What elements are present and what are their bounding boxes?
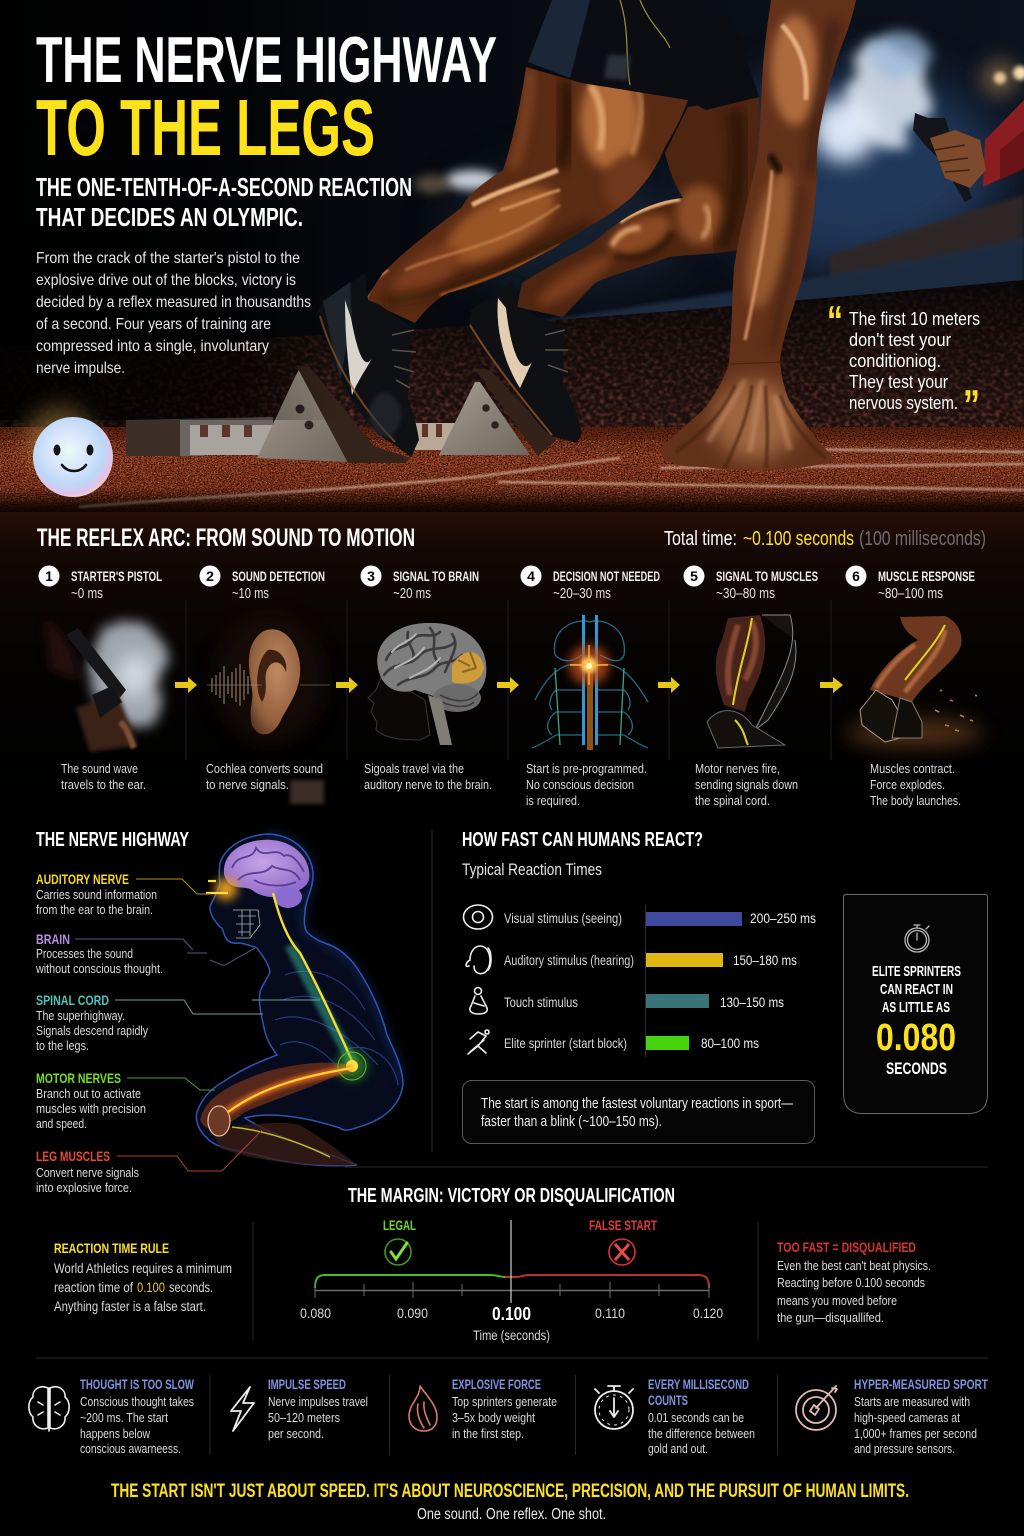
fact: every millisecond counts: EVERY MILLISECOND: [648, 1377, 749, 1392]
step 3: signal to brain: SIGNAL TO BRAIN: [393, 569, 479, 584]
step 1: starter's pistol: [38, 566, 166, 792]
step 3: signal to brain: Sigoals travel via the: [364, 761, 464, 776]
fact: thought is too slow: conscious awarneess.: [80, 1441, 181, 1456]
step 2: sound detection: Cochlea converts sound: [206, 761, 323, 776]
too fast disqualified: means you moved before: [777, 1293, 897, 1308]
auditory glow: [215, 878, 237, 900]
intro text: nerve impulse.: [36, 360, 125, 377]
timeline chart: legal vs false start: Time (seconds): [473, 1328, 550, 1343]
total time: (100 milliseconds): [859, 528, 986, 550]
step 4: decision not needed: 4: [527, 568, 535, 584]
too fast disqualified: Reacting before 0.100 seconds: [777, 1275, 925, 1290]
closing statement: One sound. One reflex. One shot.: [417, 1506, 606, 1523]
step 5: signal to muscles: sending signals down: [695, 777, 798, 792]
step 1: starter's pistol: The sound wave: [61, 761, 138, 776]
label: leg muscles: into explosive force.: [36, 1180, 132, 1195]
row: auditory: Auditory stimulus (hearing): [504, 953, 634, 968]
arrow: [336, 677, 358, 693]
step 6: muscle response: Muscles contract.: [870, 761, 955, 776]
row: visual: [464, 905, 816, 929]
total time: ~0.100 seconds: [743, 528, 854, 550]
pull quote: “: [827, 297, 843, 344]
label: motor nerves: MOTOR NERVES: [36, 1070, 121, 1086]
panel: how fast can humans react: [462, 829, 988, 1144]
heading: margin: THE MARGIN: VICTORY OR DISQUALIFICATION: [348, 1185, 675, 1207]
subtitle: [36, 172, 412, 232]
fact: explosive force: [409, 1377, 557, 1441]
fact: thought is too slow: THOUGHT IS TOO SLOW: [80, 1377, 194, 1392]
intro text: From the crack of the starter's pistol to the: [36, 250, 300, 267]
fact: thought is too slow: [29, 1377, 194, 1456]
timeline chart: legal vs false start: 0.100: [492, 1304, 531, 1324]
row: visual: Visual stimulus (seeing): [504, 911, 622, 926]
closing statement: [111, 1481, 909, 1523]
heading: nerve highway: THE NERVE HIGHWAY: [36, 829, 189, 851]
pull quote: [827, 297, 980, 428]
supporting arm and hand: [660, 0, 856, 470]
timeline chart: legal vs false start: 0.110: [595, 1306, 625, 1321]
step 5: signal to muscles: 5: [690, 568, 698, 584]
hero photo: sprinter in the blocks: [0, 0, 1024, 520]
left shoe: [318, 273, 419, 457]
fact: impulse speed: per second.: [268, 1426, 324, 1441]
step 4: decision not needed: DECISION NOT NEEDED: [553, 569, 660, 584]
step 4: decision not needed: is required.: [526, 793, 580, 808]
row: auditory: 150–180 ms: [733, 953, 797, 968]
stat card: 0.080 seconds: AS LITTLE AS: [882, 999, 950, 1016]
reaction time rule: REACTION TIME RULE: [54, 1240, 169, 1256]
stat card: 0.080 seconds: 0.080: [876, 1017, 956, 1059]
subtitle: THAT DECIDES AN OLYMPIC.: [36, 202, 303, 232]
intro text: [36, 250, 311, 377]
intro text: compressed into a single, involuntary: [36, 338, 269, 355]
label: spinal cord: SPINAL CORD: [36, 992, 109, 1008]
label: brain: without conscious thought.: [35, 961, 163, 976]
pull quote: don't test your: [849, 330, 951, 350]
intro text: of a second. Four years of training are: [36, 316, 271, 333]
illustration: brain in head silhouette: [368, 623, 486, 745]
stat card: 0.080 seconds: ELITE SPRINTERS: [872, 963, 961, 980]
shorts: [528, 0, 759, 110]
label: motor nerves: Branch out to activate: [36, 1086, 141, 1101]
fact: every millisecond counts: [595, 1377, 755, 1456]
illustration: explosive leg and dust: [847, 616, 983, 747]
step 3: signal to brain: [360, 566, 492, 792]
step 2: sound detection: SOUND DETECTION: [232, 569, 325, 584]
step 5: signal to muscles: the spinal cord.: [695, 793, 770, 808]
subheading: Typical Reaction Times: [462, 861, 602, 879]
timeline chart: legal vs false start: [300, 1217, 723, 1343]
icon: cross: [609, 1239, 635, 1265]
label: spinal cord: The superhighway.: [36, 1008, 125, 1023]
illustration: leg with nerve: [707, 615, 796, 748]
step 5: signal to muscles: ~30–80 ms: [716, 586, 775, 602]
row: visual: 200–250 ms: [750, 911, 816, 926]
fact: impulse speed: 50–120 meters: [268, 1410, 340, 1425]
timeline chart: legal vs false start: 0.120: [693, 1306, 723, 1321]
heading: reaction: HOW FAST CAN HUMANS REACT?: [462, 829, 703, 851]
pull quote: The first 10 meters: [849, 309, 980, 329]
timeline chart: legal vs false start: LEGAL: [383, 1217, 416, 1233]
timeline chart: legal vs false start: 0.080: [300, 1306, 331, 1321]
step 6: muscle response: 6: [852, 568, 860, 584]
stadium lights: [813, 98, 877, 162]
fact: explosive force: 3–5x body weight: [452, 1410, 535, 1425]
fact: impulse speed: [231, 1377, 368, 1441]
label: auditory nerve: from the ear to the brain.: [36, 902, 153, 917]
intro text: explosive drive out of the blocks, victory is: [36, 272, 296, 289]
fact: every millisecond counts: 0.01 seconds can be: [648, 1410, 744, 1425]
upper crowd band: [830, 195, 1024, 295]
step 4: decision not needed: ~20–30 ms: [553, 586, 611, 602]
label: spinal cord: [36, 992, 320, 1053]
timeline chart: legal vs false start: FALSE START: [589, 1217, 657, 1233]
fade to page black: [0, 488, 1024, 520]
label: auditory nerve: AUDITORY NERVE: [36, 871, 129, 887]
reaction time rule: [54, 1240, 232, 1314]
row: touch: Touch stimulus: [504, 995, 578, 1010]
step 6: muscle response: MUSCLE RESPONSE: [878, 569, 975, 584]
panel: the nerve highway: [35, 829, 403, 1195]
ribs: [275, 971, 398, 1085]
step 4: decision not needed: No conscious decision: [526, 777, 634, 792]
fact: every millisecond counts: the difference between: [648, 1426, 755, 1441]
reaction time rule: 0.100: [137, 1280, 165, 1295]
reaction time rule: seconds.: [169, 1280, 213, 1295]
label: leg muscles: LEG MUSCLES: [36, 1148, 110, 1164]
fact: hyper-measured sport: Starts are measured with: [854, 1394, 970, 1409]
fact: hyper-measured sport: and pressure sensors.: [854, 1441, 955, 1456]
stat card: 0.080 seconds: SECONDS: [886, 1059, 947, 1078]
step 1: starter's pistol: 1: [45, 568, 53, 584]
rear starting rail: [126, 417, 462, 456]
step 4: decision not needed: Start is pre-programmed.: [526, 761, 647, 776]
brain: [224, 840, 309, 897]
label: motor nerves: [36, 1070, 215, 1131]
title: [36, 23, 497, 172]
fact: impulse speed: Nerve impulses travel: [268, 1394, 368, 1409]
stand roof band: [480, 238, 1024, 358]
step 2: sound detection: 2: [206, 568, 214, 584]
row: auditory: [466, 946, 797, 974]
step 3: signal to brain: auditory nerve to the brain.: [364, 777, 492, 792]
label: spinal cord: to the legs.: [36, 1038, 89, 1053]
fact: hyper-measured sport: 1,000+ frames per second: [854, 1426, 977, 1441]
fact: thought is too slow: Conscious thought takes: [80, 1394, 194, 1409]
illustration: ear: [207, 615, 330, 745]
fact strip: [29, 1375, 989, 1456]
starting block left: [257, 365, 410, 463]
step 6: muscle response: The body launches.: [870, 793, 961, 808]
label: leg muscles: Convert nerve signals: [36, 1165, 139, 1180]
pull quote: They test your: [849, 372, 948, 392]
label: brain: [35, 931, 255, 976]
total time: Total time:: [664, 528, 737, 550]
fact: every millisecond counts: COUNTS: [648, 1393, 688, 1408]
fact: thought is too slow: ~200 ms. The start: [80, 1410, 168, 1425]
step 2: sound detection: [200, 566, 330, 804]
fact: impulse speed: IMPULSE SPEED: [268, 1377, 346, 1392]
title: THE NERVE HIGHWAY: [36, 23, 497, 96]
arrow: [497, 677, 519, 693]
panel: the margin: [54, 1185, 931, 1343]
label: spinal cord: Signals descend rapidly: [36, 1023, 148, 1038]
step 6: muscle response: ~80–100 ms: [878, 586, 943, 602]
step 1: starter's pistol: travels to the ear.: [61, 777, 146, 792]
skull detail: [233, 910, 260, 938]
label: auditory nerve: [36, 871, 210, 917]
icon: check: [385, 1239, 411, 1265]
step 2: sound detection: to nerve signals.: [206, 777, 289, 792]
fact: explosive force: in the first step.: [452, 1426, 524, 1441]
fact: hyper-measured sport: high-speed cameras at: [854, 1410, 960, 1425]
arrow: [658, 677, 680, 693]
fact: thought is too slow: happens below: [80, 1426, 150, 1441]
step 5: signal to muscles: Motor nerves fire,: [695, 761, 780, 776]
step 5: signal to muscles: [684, 566, 818, 808]
icon: smiling iridescent orb: [26, 406, 113, 497]
row: touch: 130–150 ms: [720, 995, 784, 1010]
pull quote: conditioniog.: [849, 351, 941, 371]
panel: reflex arc: [0, 512, 1024, 812]
row: sprinter: Elite sprinter (start block): [504, 1036, 627, 1051]
step 6: muscle response: Force explodes.: [870, 777, 945, 792]
callout: faster than a blink: The start is among the fastest voluntary reactions in sport—: [481, 1096, 793, 1112]
track: [0, 427, 1024, 517]
fact: explosive force: Top sprinters generate: [452, 1394, 557, 1409]
fact: every millisecond counts: gold and out.: [648, 1441, 708, 1456]
step 1: starter's pistol: STARTER'S PISTOL: [71, 569, 162, 584]
too fast disqualified: the gun—disquallifed.: [777, 1310, 884, 1325]
stat card: 0.080 seconds: [844, 894, 988, 1114]
label: brain: BRAIN: [36, 931, 70, 947]
subtitle: THE ONE-TENTH-OF-A-SECOND REACTION: [36, 172, 412, 202]
label: leg muscles: [36, 1130, 262, 1195]
pull quote: ”: [963, 381, 980, 428]
step 5: signal to muscles: SIGNAL TO MUSCLES: [716, 569, 818, 584]
illustration: pistol and smoke: [45, 618, 166, 752]
row: sprinter: 80–100 ms: [701, 1036, 759, 1051]
step 1: starter's pistol: ~0 ms: [71, 586, 103, 602]
step 3: signal to brain: ~20 ms: [393, 586, 431, 602]
too fast disqualified: Even the best can't beat physics.: [777, 1258, 931, 1273]
starter's arm with pistol: [913, 100, 1024, 202]
fact: hyper-measured sport: [796, 1377, 989, 1456]
right shoe: [468, 283, 582, 443]
timeline chart: legal vs false start: 0.090: [397, 1306, 428, 1321]
step 3: signal to brain: 3: [367, 568, 375, 584]
pull quote: nervous system.: [849, 393, 958, 413]
heading: reflex arc: THE REFLEX ARC: FROM SOUND TO MOTION: [37, 524, 415, 552]
lower leg: [212, 1123, 357, 1166]
starting block right: [439, 368, 556, 456]
label: motor nerves: muscles with precision: [36, 1101, 146, 1116]
arrow: [820, 677, 843, 693]
reaction time rule: reaction time of: [54, 1280, 133, 1295]
total time: [664, 528, 986, 550]
stat card: 0.080 seconds: CAN REACT IN: [880, 981, 953, 998]
title: TO THE LEGS: [36, 83, 375, 172]
step 2: sound detection: ~10 ms: [232, 586, 269, 602]
diagram: glowing body with nerve path: [196, 834, 403, 1166]
thigh muscles: [200, 1063, 352, 1129]
illustration: spine with orange spark: [532, 615, 648, 750]
front leg: [365, 67, 688, 323]
step 6: muscle response: [846, 566, 983, 808]
too fast disqualified: [777, 1239, 931, 1325]
arrow: [175, 677, 197, 693]
label: brain: Processes the sound: [36, 946, 133, 961]
too fast disqualified: TOO FAST = DISQUALIFIED: [777, 1239, 916, 1255]
readability fade on the left: [0, 0, 340, 420]
reaction time rule: World Athletics requires a minimum: [54, 1261, 232, 1276]
reaction time rule: Anything faster is a false start.: [54, 1299, 206, 1314]
row: sprinter: [468, 1030, 759, 1054]
callout: faster than a blink: faster than a blink (~100–150 ms).: [481, 1114, 662, 1130]
label: auditory nerve: Carries sound information: [36, 887, 157, 902]
spinal cord glow: [290, 945, 353, 1063]
step 4: decision not needed: [520, 566, 660, 808]
fact: explosive force: EXPLOSIVE FORCE: [452, 1377, 541, 1392]
intro text: decided by a reflex measured in thousandths: [36, 294, 311, 311]
leg nerve glow: [228, 1068, 352, 1112]
back leg: [517, 97, 760, 317]
callout: faster than a blink: [462, 1080, 814, 1144]
icon: stopwatch: [905, 925, 929, 952]
row: touch: [470, 988, 784, 1014]
lower crowd: [0, 280, 1024, 430]
label: motor nerves: and speed.: [36, 1116, 87, 1131]
